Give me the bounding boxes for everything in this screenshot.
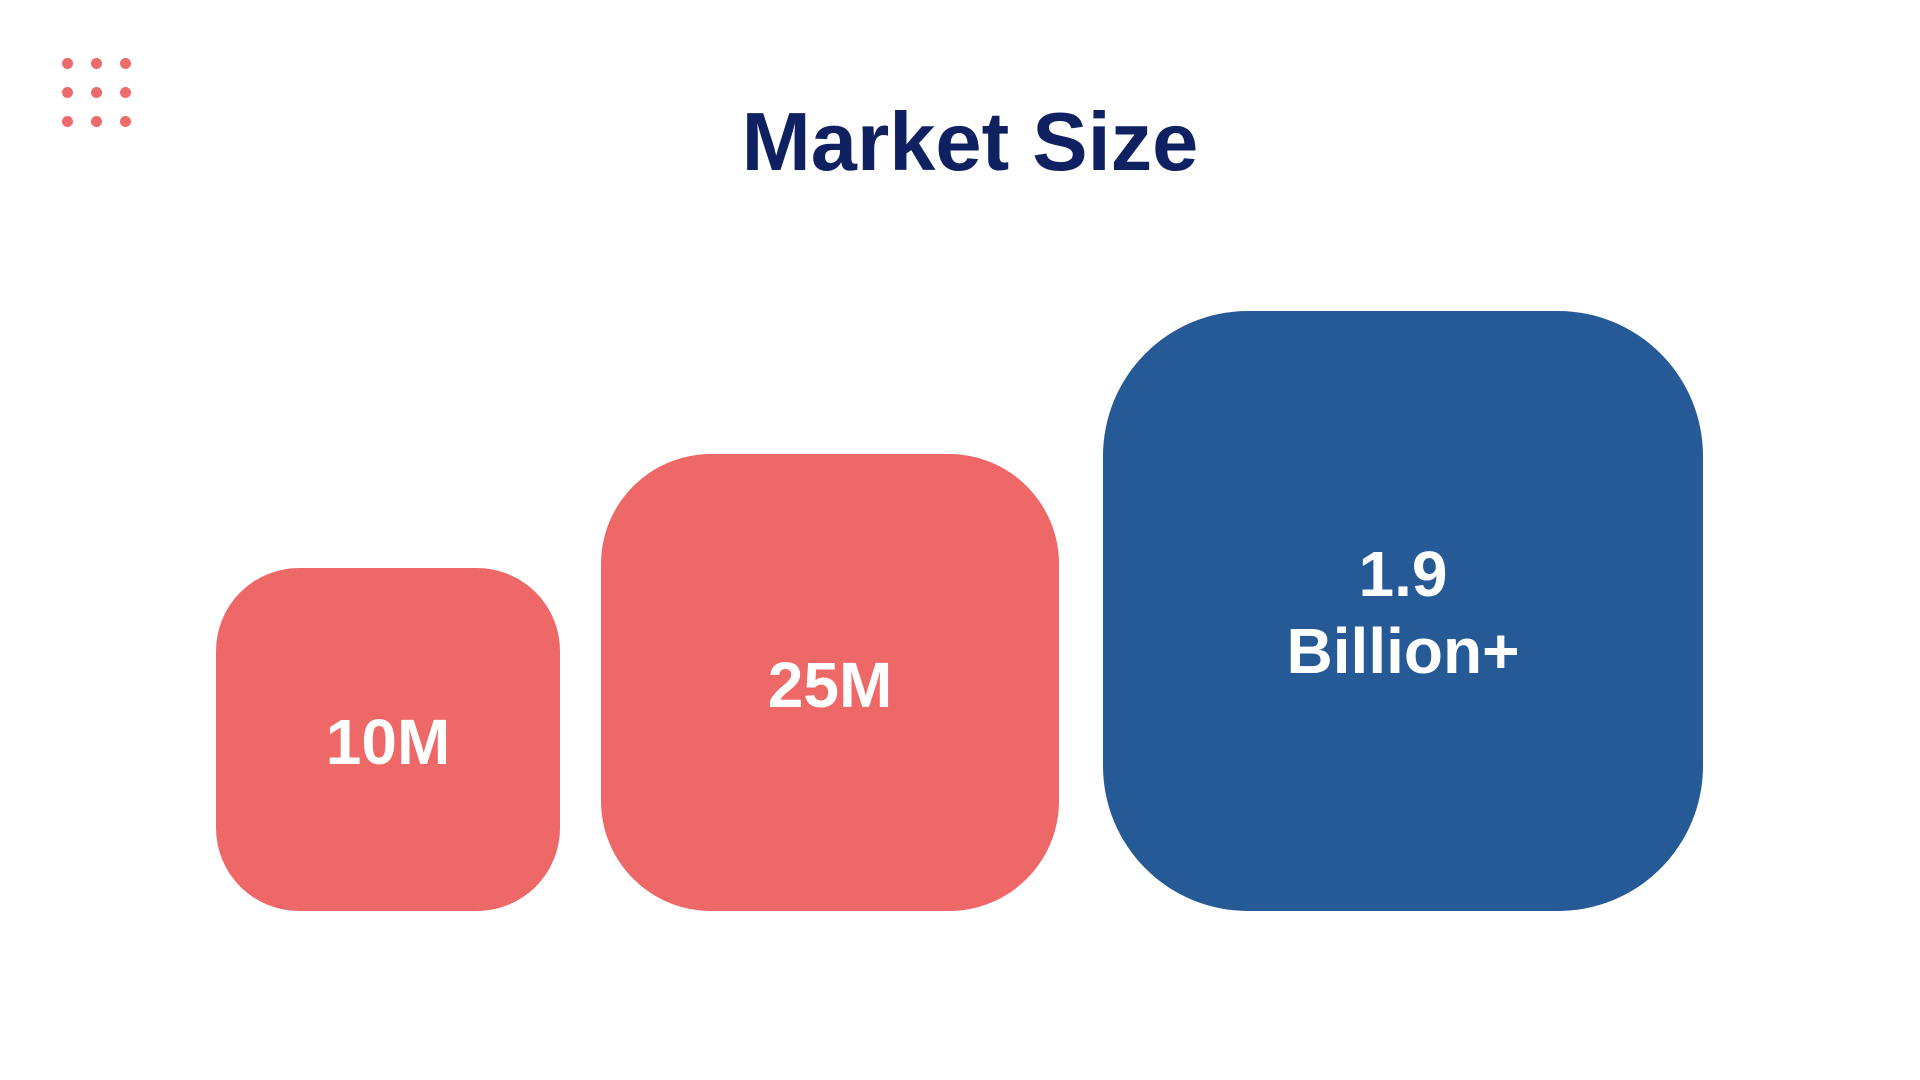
box: 1.9 Billion+: Billion+ [1287, 615, 1519, 687]
box: 10M [216, 568, 560, 911]
box: 1.9 Billion+ [1103, 311, 1703, 911]
title: Market Size [742, 95, 1198, 188]
box: 1.9 Billion+: 1.9 [1359, 538, 1447, 610]
box: 10M: 10M [326, 706, 450, 778]
box: 25M [601, 454, 1059, 911]
icon: dot grid [62, 58, 131, 127]
box: 25M: 25M [768, 648, 892, 720]
